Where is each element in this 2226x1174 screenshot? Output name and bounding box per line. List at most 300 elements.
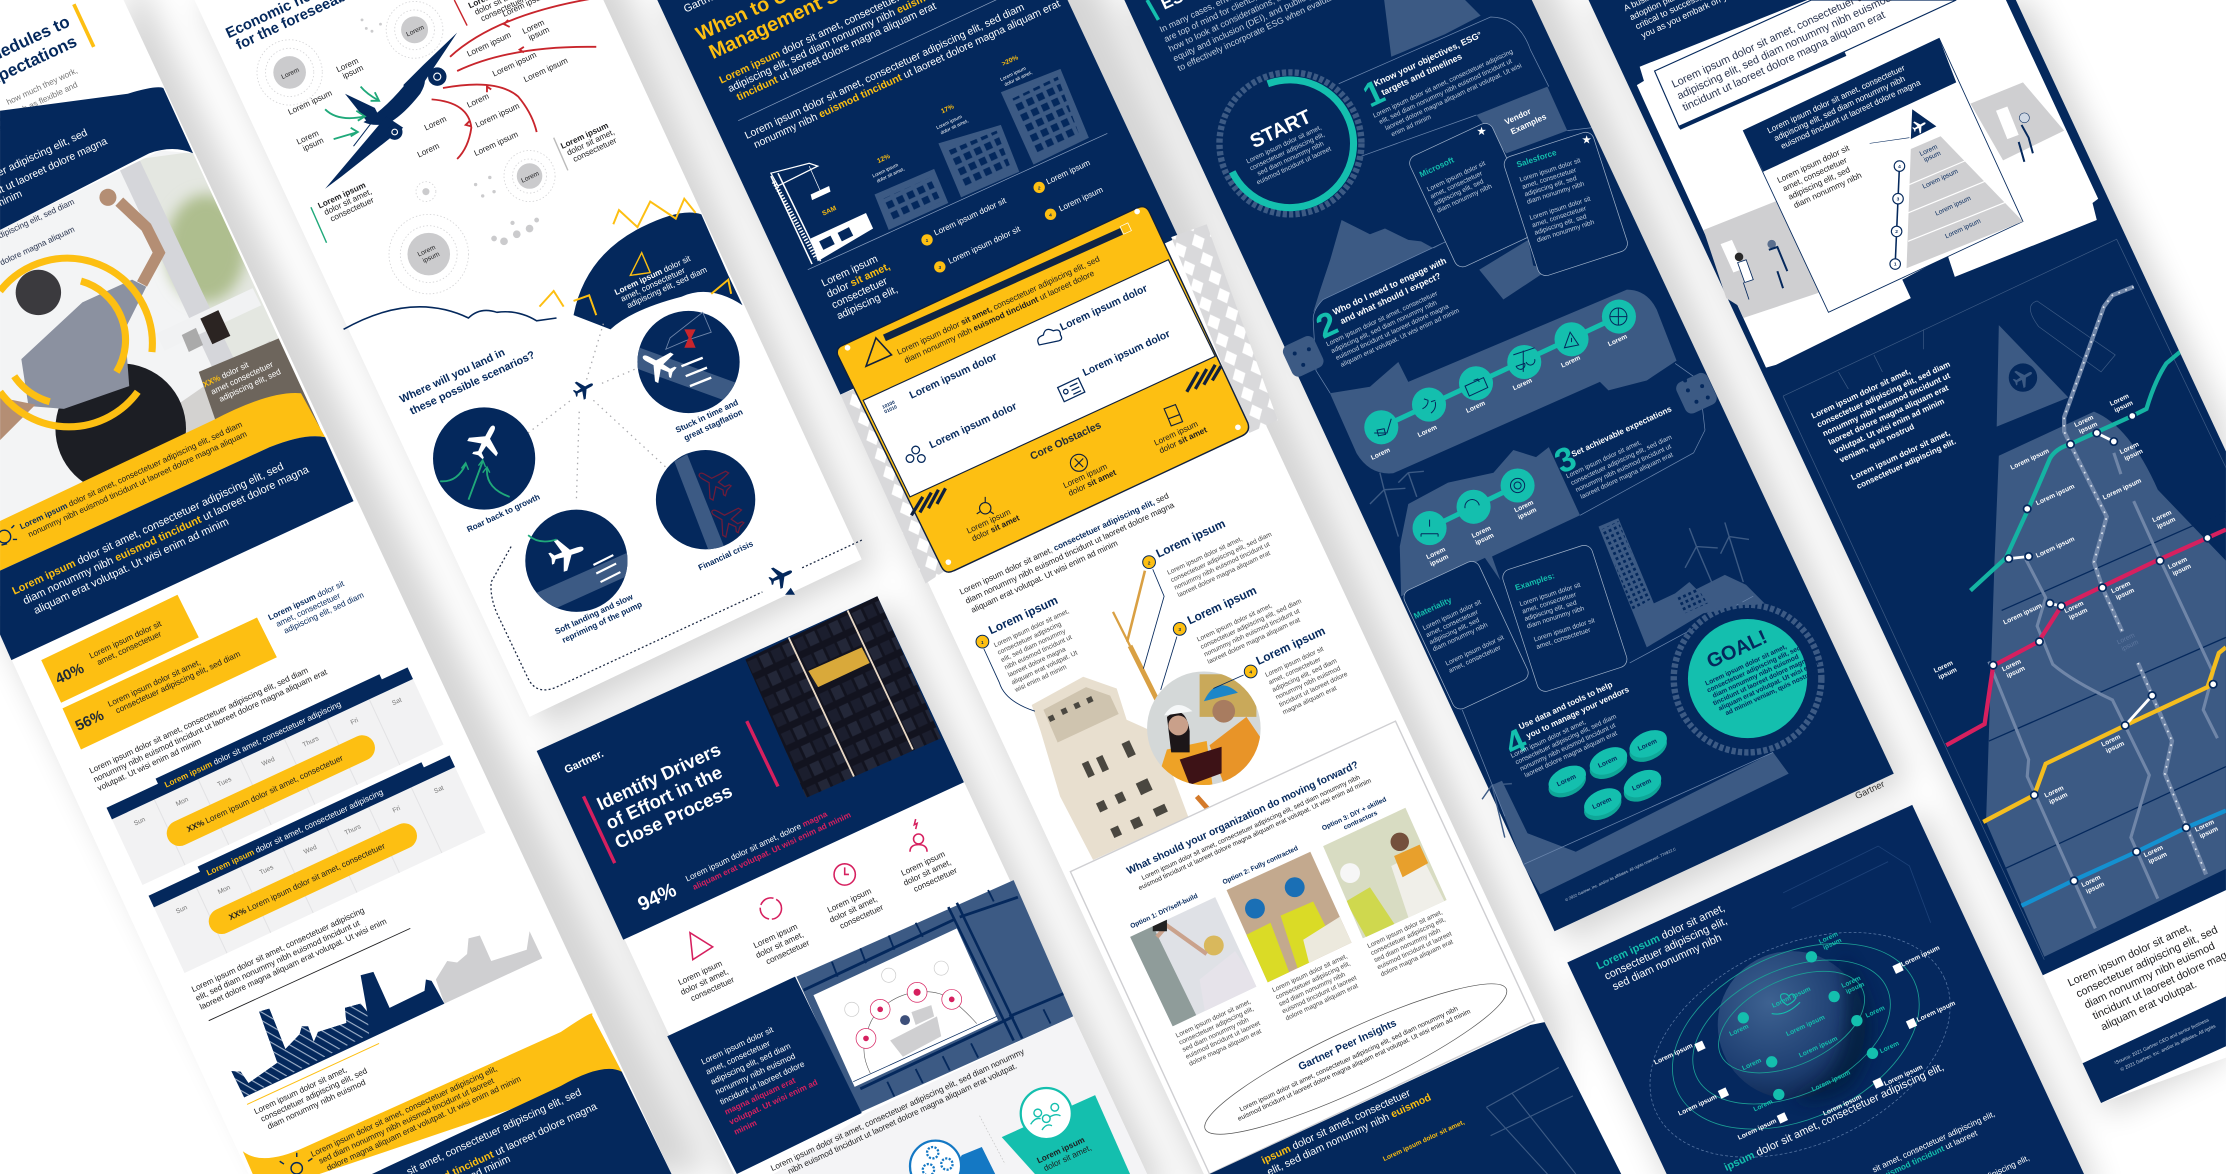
coin buttons — [1544, 725, 1671, 826]
bottom yellow and navy wave: Lorem ipsum dolor sit amet, consectetuer adipiscing elit, — [309, 1064, 499, 1159]
station labels: Lorem — [2063, 600, 2085, 615]
globe with orbits: Lorem ipsum — [1785, 1014, 1826, 1038]
goal ring — [1674, 605, 1823, 752]
header block — [537, 596, 964, 940]
step 4: 4 — [1499, 721, 1533, 764]
navy footer section: ipsum dolor sit amet, consectetuer — [1260, 1087, 1412, 1167]
note: gray callout — [554, 120, 620, 170]
calendar one: Tues — [217, 776, 233, 789]
plane labels — [287, 0, 569, 159]
icon: refresh — [760, 898, 782, 919]
peer insights callout — [1193, 962, 1519, 1156]
step 4 — [1499, 674, 1631, 781]
numbered notes: Lorem ipsum dolor sit amet, — [993, 608, 1070, 649]
crane caption: adipiscing elit, — [835, 284, 900, 322]
body paragraph: nonummy nibh euismod tincidunt ut laoreet dolore magna aliquam erat — [92, 667, 329, 784]
option 1: consectetuer adipiscing elit, — [1178, 1006, 1255, 1047]
connector outlines — [1313, 17, 1773, 865]
body paragraph: volutpat. Ut wisi enim ad minim — [96, 737, 203, 793]
closing paragraph: consectetuer adipiscing elit, sed — [2074, 924, 2220, 1000]
numbered notes: Lorem ipsum — [986, 593, 1060, 637]
option 1: Lorem ipsum dolor sit amet, — [1175, 998, 1252, 1040]
step 1: targets and timelines — [1380, 51, 1464, 98]
plane labels: Lorem — [295, 129, 320, 147]
numbered steps: 4 — [1898, 164, 1901, 170]
icon row: consectetuer — [838, 903, 885, 931]
pyramid: ipsum — [1923, 150, 1942, 164]
progress bar — [884, 231, 1122, 338]
vendor card: Microsoft — [1407, 121, 1541, 270]
step 4: Use data and tools to help — [1517, 680, 1614, 731]
station labels: Lorem — [2151, 509, 2173, 524]
skyline caption: Lorem ipsum dolor sit amet, — [253, 1065, 348, 1116]
vendor card: Microsoft: Microsoft — [1418, 155, 1456, 179]
pyramid card: amet, consectetuer — [1781, 156, 1849, 193]
card: materiality: adipiscing elit, sed — [1428, 617, 1481, 646]
option 3: dolore magna aliquam erat — [1380, 939, 1454, 978]
building photo — [1032, 677, 1188, 860]
peer insights callout: euismod tincidunt ut laoreet dolore magna aliquam erat volutpat. Ut wisi enim ad minim — [1237, 1008, 1472, 1123]
skyline caption: diam nonummy nibh euismod — [266, 1078, 367, 1131]
chart: gray risk circles: Lorem — [520, 170, 541, 185]
navy text block: magna aliquam erat — [723, 1076, 797, 1117]
plane labels: Lorem — [335, 56, 360, 74]
legend: 1 — [926, 238, 929, 244]
timeline: six nodes: Lorem — [1512, 377, 1533, 392]
note: tailwind callout: dolor sit amet, — [323, 187, 373, 217]
option 1: Option 1: DIY/self-build — [1129, 893, 1199, 930]
step 4: you to manage your vendors — [1525, 685, 1631, 741]
legend: 4 — [1049, 212, 1052, 218]
station labels: Lorem — [2109, 393, 2130, 408]
numbered notes: magna aliquam erat — [1282, 685, 1338, 716]
station labels: Lorem — [1933, 660, 1954, 675]
station labels: ipsum — [2085, 881, 2106, 896]
step 4: nonummy nibh euismod tincidunt ut — [1519, 722, 1617, 773]
coin buttons: Lorem — [1597, 755, 1619, 770]
crane photo — [1113, 571, 1208, 809]
airport triangle — [1997, 325, 2068, 427]
icon: hexagons — [906, 446, 925, 462]
card: examples: Lorem ipsum dolor sit — [1533, 617, 1596, 644]
globe with orbits: Lorem ipsum — [1900, 945, 1941, 969]
plane labels: Lorem ipsum — [287, 89, 334, 117]
station labels: Lorem — [2001, 658, 2022, 673]
paragraph below sign: diam nonummy nibh euismod tincidunt ut laoreet dolore magna — [964, 500, 1176, 606]
header block: aliquam erat volutpat. Ut wisi enim ad minim — [691, 810, 852, 892]
icon: id card — [1058, 378, 1085, 402]
card: examples: Examples: — [1514, 571, 1556, 592]
sign: core obstacles: Lorem ipsum dolor — [927, 400, 1019, 451]
numbered notes: 3 — [1178, 627, 1181, 633]
vendor card: Salesforce: Lorem ipsum dolor sit — [1519, 157, 1582, 184]
numbered notes: nibh euismod tincidunt ut — [1004, 634, 1073, 672]
numbered notes: Lorem ipsum — [1154, 516, 1227, 561]
navy chart section: Lorem ipsum dolor sit amet, consectetuer adipiscing elit, sed diam — [743, 1, 1026, 142]
step 1: Vendor — [1503, 107, 1532, 127]
callout box — [1655, 0, 1956, 128]
chart: gray risk circles: Lorem — [405, 24, 426, 38]
workers photo circle — [1147, 672, 1261, 785]
note: headwind callout — [454, 0, 527, 26]
calendar two: Mon — [217, 884, 232, 896]
station labels: Lorem — [2119, 441, 2140, 456]
turbines and windows — [1370, 471, 1749, 838]
office photo with person and rings: dolore magna aliquam — [0, 225, 76, 267]
numbered notes: tincidunt ut laoreet dolore — [1278, 671, 1349, 709]
scenario: roar back to growth: Roar back to growth — [466, 492, 541, 534]
buildings chart: SAM — [821, 205, 838, 218]
numbered notes: adipiscing elit, sed diam — [1271, 657, 1339, 694]
heading: schedules — [0, 4, 94, 94]
station labels: Lorem ipsum — [2035, 536, 2076, 560]
option 2: sed diam nonummy nibh — [1278, 971, 1347, 1008]
card: examples: amet, consectetuer — [1521, 591, 1578, 615]
stat: 56 percent: consectetuer adipiscing elit, sed diam — [114, 649, 242, 715]
panel C: when to use management — [657, 0, 1621, 1174]
timeline: three nodes: Lorem — [1513, 499, 1535, 514]
map text: laoreet dolore magna aliquam erat — [1827, 383, 1950, 447]
illustration window — [796, 880, 1073, 1113]
numbered notes: 4 — [1249, 670, 1252, 676]
body paragraph: Lorem ipsum dolor sit amet, consectetuer adipiscing elit, sed diam — [88, 666, 310, 775]
options card: euismod tincidunt ut laoreet dolore magna aliquam erat volutpat. Ut wisi enim ad minim — [1138, 777, 1373, 892]
blue line — [2022, 811, 2226, 906]
stat: 40 percent: amet, consectetuer — [96, 629, 163, 667]
calendar one: Mon — [175, 796, 190, 808]
vendor card: Microsoft: ★ — [1476, 125, 1487, 138]
step 2: Lorem ipsum dolor sit amet, consectetuer — [1325, 290, 1439, 348]
station labels: ipsum — [2006, 665, 2026, 680]
card: materiality: Materiality — [1412, 595, 1453, 621]
coin buttons: Lorem — [1637, 738, 1658, 753]
legend: Lorem ipsum — [1045, 158, 1092, 186]
timeline: three nodes: Lorem — [1471, 525, 1492, 540]
icon: crane and fence — [771, 163, 873, 264]
icon: clock — [834, 864, 855, 885]
pyramid: Lorem ipsum — [1921, 168, 1960, 191]
paragraph below sign: aliquam erat volutpat. Ut wisi enim ad minim — [970, 539, 1119, 615]
globe with orbits: Lorem ipsum — [1653, 1042, 1694, 1067]
map text: consectetuer adipiscing elit. — [1855, 437, 1957, 491]
navy summary band: aliquam erat volutpat. Ut wisi enim ad minim — [32, 516, 231, 617]
teal card with team — [1002, 1088, 1130, 1174]
fence pattern behind sign — [840, 224, 1278, 583]
heading text: sed diam nonummy nibh — [1611, 932, 1724, 993]
heading: scenarios: Where will you land in — [398, 347, 507, 406]
skyline paragraph: Lorem ipsum dolor sit amet, consectetuer adipiscing — [190, 906, 366, 994]
obstacle items: Lorem ipsum — [1062, 462, 1109, 490]
calendar two: Tues — [259, 864, 275, 877]
source footer: © 2021 Gartner, Inc. and/or its affiliates. All rights — [2119, 1022, 2217, 1073]
station labels: Lorem — [2073, 414, 2095, 429]
station labels: Lorem — [2143, 844, 2164, 859]
stat: 56 percent — [63, 618, 277, 750]
icon: plane centre — [570, 375, 597, 402]
options card: Lorem ipsum dolor sit amet, consectetuer adipiscing elit, sed diam nonummy nibh — [1141, 774, 1361, 882]
goal ring: diam nonummy nibh euismod — [1712, 654, 1800, 700]
numbered notes: Lorem ipsum — [1185, 583, 1259, 627]
vendor card: Salesforce: diam nonummy nibh — [1536, 219, 1596, 244]
vendor card: Salesforce: Salesforce — [1515, 148, 1558, 169]
city block area — [1986, 412, 2226, 957]
step 1 — [1357, 29, 1548, 142]
vendor card: Salesforce — [1502, 130, 1630, 278]
bottom yellow and navy wave: sed diam nonummy nibh euismod tincidunt ut laoreet — [317, 1076, 496, 1166]
icon: warning — [690, 933, 713, 960]
calendar two: Thurs — [344, 823, 363, 837]
vendor card: Salesforce: adipiscing elit, sed — [1534, 213, 1588, 237]
options heading: What should your organization do moving forward? — [1125, 760, 1360, 877]
title: Close Process — [611, 780, 735, 853]
lower gray section: nibh euismod tincidunt ut laoreet dolore magna aliquam erat volutpat. — [786, 1061, 1018, 1174]
start ring — [1219, 72, 1361, 214]
goal ring: ad minim veniam, quis nostrud — [1724, 669, 1816, 717]
numbered notes: laoreet dolore magna aliquam erat — [1207, 617, 1301, 666]
plane labels: Lorem ipsum — [474, 101, 521, 130]
buildings chart: 17% — [940, 103, 955, 115]
title: Identify Drivers — [593, 738, 724, 814]
calendar one — [104, 662, 444, 885]
step 3: laoreet dolore magna aliquam erat — [1579, 452, 1674, 501]
option 3: sed diam nonummy nibh — [1373, 927, 1442, 964]
vendor card: Microsoft: diam nonummy nibh — [1436, 183, 1493, 215]
step 2: 2 — [1310, 304, 1344, 347]
side note: Lorem ipsum dolor sit — [267, 579, 346, 622]
Gartner wordmark: Gartner — [1853, 779, 1886, 801]
step 1: Lorem ipsum dolor sit amet, consectetuer adipiscing — [1372, 48, 1514, 120]
peer insights callout: Gartner Peer Insights — [1297, 1017, 1399, 1073]
decorative outlines — [1783, 846, 1931, 923]
chart: gray risk circles: ipsum — [422, 251, 441, 265]
navy text block: nonummy nibh euismod — [714, 1051, 797, 1097]
chart: gray risk circles: Lorem — [280, 67, 301, 81]
option 3: euismod tincidunt ut laoreet — [1376, 931, 1453, 971]
skyline chart — [209, 928, 542, 1104]
scenario: financial crisis: Financial crisis — [697, 539, 755, 572]
station labels: ipsum — [2123, 448, 2144, 463]
start ring: sed diam nonummy nibh — [1256, 140, 1325, 178]
timeline: six nodes: Lorem — [1560, 355, 1582, 370]
bottom yellow and navy wave — [243, 1013, 672, 1174]
globe with orbits: ipsum — [1822, 937, 1843, 952]
navy warning dome — [539, 199, 742, 329]
station labels: ipsum — [2115, 587, 2136, 602]
step 1: Examples — [1509, 112, 1548, 136]
map text: consectetuer adipiscing elit, sed diam — [1816, 360, 1952, 429]
pyramid card: diam nonummy nibh — [1792, 171, 1864, 210]
legend: Lorem ipsum dolor sit — [947, 224, 1022, 266]
intro text: es, such as flexible and — [0, 80, 79, 125]
station labels: Lorem — [2194, 819, 2215, 834]
option 2: dolore magna aliquam erat — [1284, 983, 1359, 1022]
heading bar — [1147, 0, 1198, 20]
note: gray callout: Lorem ipsum — [559, 121, 610, 151]
gray lines — [1989, 453, 2217, 928]
globe with orbits: Lorem — [1818, 931, 1839, 946]
coin buttons: Lorem — [1631, 778, 1653, 793]
icon row — [675, 819, 959, 1006]
legend: 3 — [938, 265, 941, 271]
numbered notes: nonummy nibh euismod tincidunt ut — [1203, 608, 1301, 658]
chart: gray risk circles — [257, 1, 555, 294]
plane labels: Lorem — [423, 114, 448, 132]
side note: adipiscing elit, sed diam — [282, 590, 365, 636]
option 3 — [1321, 796, 1457, 978]
source footer — [2083, 997, 2226, 1103]
plane labels: ipsum — [341, 63, 365, 81]
navy map frame — [1589, 0, 2226, 975]
station labels: ipsum — [2105, 740, 2126, 755]
goal ring: aliquam erat volutpat. Ut wisi enim — [1718, 660, 1820, 713]
numbered notes: nonummy nibh euismod — [1275, 665, 1342, 701]
card: examples: amet, consectetuer — [1535, 627, 1592, 651]
calendar one: Sun — [133, 816, 147, 828]
office photo with person and rings: amet consectetuer — [210, 360, 275, 397]
buildings chart: dolor sit amet, — [876, 166, 906, 185]
pyramid card: adipiscing elit, sed diam nonummy nibh — [1773, 74, 1907, 143]
intro lines: tincidunt ut laoreet dolore magna aliquam erat — [735, 0, 938, 103]
plane labels: Lorem ipsum — [522, 56, 569, 84]
pyramid card: euismod tincidunt ut laoreet dolore magna — [1779, 78, 1922, 151]
teal line — [1970, 341, 2193, 591]
dashed landing border — [491, 539, 863, 690]
icon row: Lorem ipsum — [677, 959, 724, 987]
card: examples: adipiscing elit, sed — [1524, 599, 1578, 623]
station labels: ipsum — [2048, 791, 2069, 806]
calendar one: Thurs — [302, 735, 321, 749]
option 2: Option 2: Fully contracted — [1222, 845, 1299, 886]
skyline paragraph: laoreet dolore magna aliquam erat volutpat. Ut wisi enim — [198, 917, 388, 1012]
option 1: euismod tincidunt ut laoreet — [1185, 1020, 1262, 1061]
scenario: soft landing — [522, 510, 643, 646]
teal card with team: Lorem ipsum — [1036, 1135, 1086, 1165]
numbered notes: Lorem ipsum dolor sit — [1264, 646, 1325, 679]
timeline: three nodes: ipsum — [1429, 553, 1450, 568]
map text: Lorem ipsum dolor sit amet, — [1810, 367, 1912, 421]
card: materiality: diam nonummy nibh — [1432, 622, 1489, 653]
obstacle items: Lorem ipsum — [1153, 419, 1199, 448]
heading text: Lorem ipsum dolor sit amet, — [1595, 902, 1727, 972]
timeline: six nodes: Lorem — [1465, 400, 1487, 415]
station labels: Lorem — [2167, 556, 2188, 571]
start ring: euismod tincidunt ut laoreet — [1256, 146, 1333, 186]
step 3: Set achievable expectations — [1570, 404, 1674, 459]
card: materiality: Lorem ipsum dolor sit — [1444, 634, 1505, 668]
numbered notes: Lorem ipsum — [1254, 624, 1327, 668]
step 1: enim ad minim — [1390, 114, 1433, 138]
pyramid: Lorem ipsum — [1944, 218, 1982, 240]
sign: core obstacles: 01010 — [883, 404, 898, 415]
green tailwind arrows — [325, 87, 379, 139]
globe with orbits: Lorem ipsum — [1883, 1064, 1924, 1088]
obstacle items: dolor sit amet — [970, 513, 1021, 543]
step 2: and what should I expect? — [1338, 271, 1442, 326]
vendor card: Salesforce: Lorem ipsum dolor sit — [1529, 196, 1592, 222]
station labels: ipsum — [2078, 421, 2099, 436]
dotted scenario paths — [528, 324, 667, 500]
intro text: how much they work, — [5, 66, 79, 107]
scenario: stuck in time: Stuck in time and — [674, 398, 740, 435]
plane labels: Lorem — [416, 141, 441, 159]
icon: hand heart — [1772, 994, 1800, 1014]
icon: warning — [866, 338, 892, 366]
step 2 — [1310, 255, 1461, 371]
card: materiality: Lorem ipsum dolor sit — [1422, 599, 1482, 632]
calendar two: Lorem ipsum dolor sit amet, consectetuer adipiscing — [205, 787, 385, 878]
globe with orbits: Lorem — [1879, 1040, 1900, 1055]
buildings chart: Lorem ipsum — [1000, 67, 1027, 83]
timeline: three nodes: ipsum — [1517, 507, 1538, 521]
station labels: ipsum — [2068, 607, 2089, 622]
globe with orbits: Lorem ipsum — [1771, 986, 1812, 1010]
option 1 — [1129, 893, 1265, 1068]
navy text block: tincidunt ut laoreet dolore — [718, 1059, 806, 1107]
map text: veniam, quis nostrud — [1838, 422, 1916, 465]
plane labels: Lorem ipsum — [466, 30, 513, 59]
sign: core obstacles: Lorem ipsum dolor — [1058, 282, 1149, 333]
icon row: consectetuer — [689, 975, 736, 1003]
dotted line — [2064, 287, 2206, 874]
office photo with person and rings — [0, 150, 320, 532]
step 4: laoreet dolore magna aliquam erat — [1524, 730, 1619, 779]
icon: airplane — [325, 33, 457, 189]
icon row: dolor sit amet, — [754, 930, 805, 960]
note: tailwind callout: consectetuer — [329, 195, 376, 224]
vendor card: Salesforce: ★ — [1581, 133, 1592, 146]
sign: core obstacles: diam nonummy nibh euismod tincidunt ut laoreet dolore — [903, 269, 1096, 365]
dice icons — [1281, 334, 1719, 416]
numbered notes: nonummy nibh euismod tincidunt ut — [1173, 541, 1271, 592]
office photo with person and rings: adipiscing elit, sed — [218, 367, 283, 404]
buildings chart: Lorem ipsum — [872, 163, 899, 179]
start ring: Lorem ipsum dolor sit amet, — [1245, 124, 1323, 165]
hazard stripes — [911, 365, 1221, 515]
crane caption: dolor sit amet, — [825, 260, 892, 300]
heading text: consectetuer adipiscing elit, — [1603, 915, 1729, 983]
navy text block: minim — [733, 1118, 758, 1137]
step 2: euismod tincidunt ut laoreet dolore magna — [1335, 303, 1450, 362]
white screen — [813, 928, 998, 1087]
legend: Lorem ipsum dolor sit — [933, 196, 1008, 237]
panel G: transit document — [1589, 0, 2226, 1103]
step 3: nonummy nibh euismod tincidunt ut — [1575, 443, 1673, 494]
station labels: ipsum — [2113, 400, 2134, 414]
panel E: ESG roadmap — [1124, 0, 1894, 931]
station labels: Lorem ipsum — [2035, 483, 2076, 507]
navy chart section: nonummy nibh euismod tincidunt ut laoreet dolore magna aliquam erat — [752, 0, 1062, 151]
stat: 40 percent — [41, 595, 199, 703]
sign: core obstacles — [837, 207, 1249, 572]
station labels: ipsum — [1937, 667, 1958, 681]
calendar two: Fri — [392, 805, 402, 815]
stat: 40 percent: Lorem ipsum dolor sit — [88, 619, 163, 661]
paragraph below sign: Lorem ipsum dolor sit amet, consectetuer adipiscing elit, sed — [958, 491, 1170, 597]
sign: core obstacles: Lorem ipsum dolor — [1081, 328, 1172, 379]
navy footer section: Lorem ipsum dolor sit amet, — [1382, 1119, 1466, 1163]
navy text block: adipiscing elit, sed diam — [709, 1041, 792, 1087]
icon: sun bulb — [280, 1153, 312, 1174]
timeline: six nodes — [1364, 300, 1636, 462]
navy text block: Lorem ipsum dolor sit — [700, 1025, 775, 1067]
cloud divider — [344, 307, 557, 329]
peer insights callout: Lorem ipsum dolor sit amet, consectetuer adipiscing elit, sed diam nonummy nibh — [1239, 1006, 1459, 1113]
red headwind arrows — [432, 0, 610, 159]
numbered notes: 1 — [981, 640, 984, 646]
globe with orbits: Lorem — [1753, 1098, 1774, 1113]
blue card with gears — [910, 1141, 995, 1174]
closing paragraph: aliquam erat volutpat. — [2099, 978, 2199, 1033]
